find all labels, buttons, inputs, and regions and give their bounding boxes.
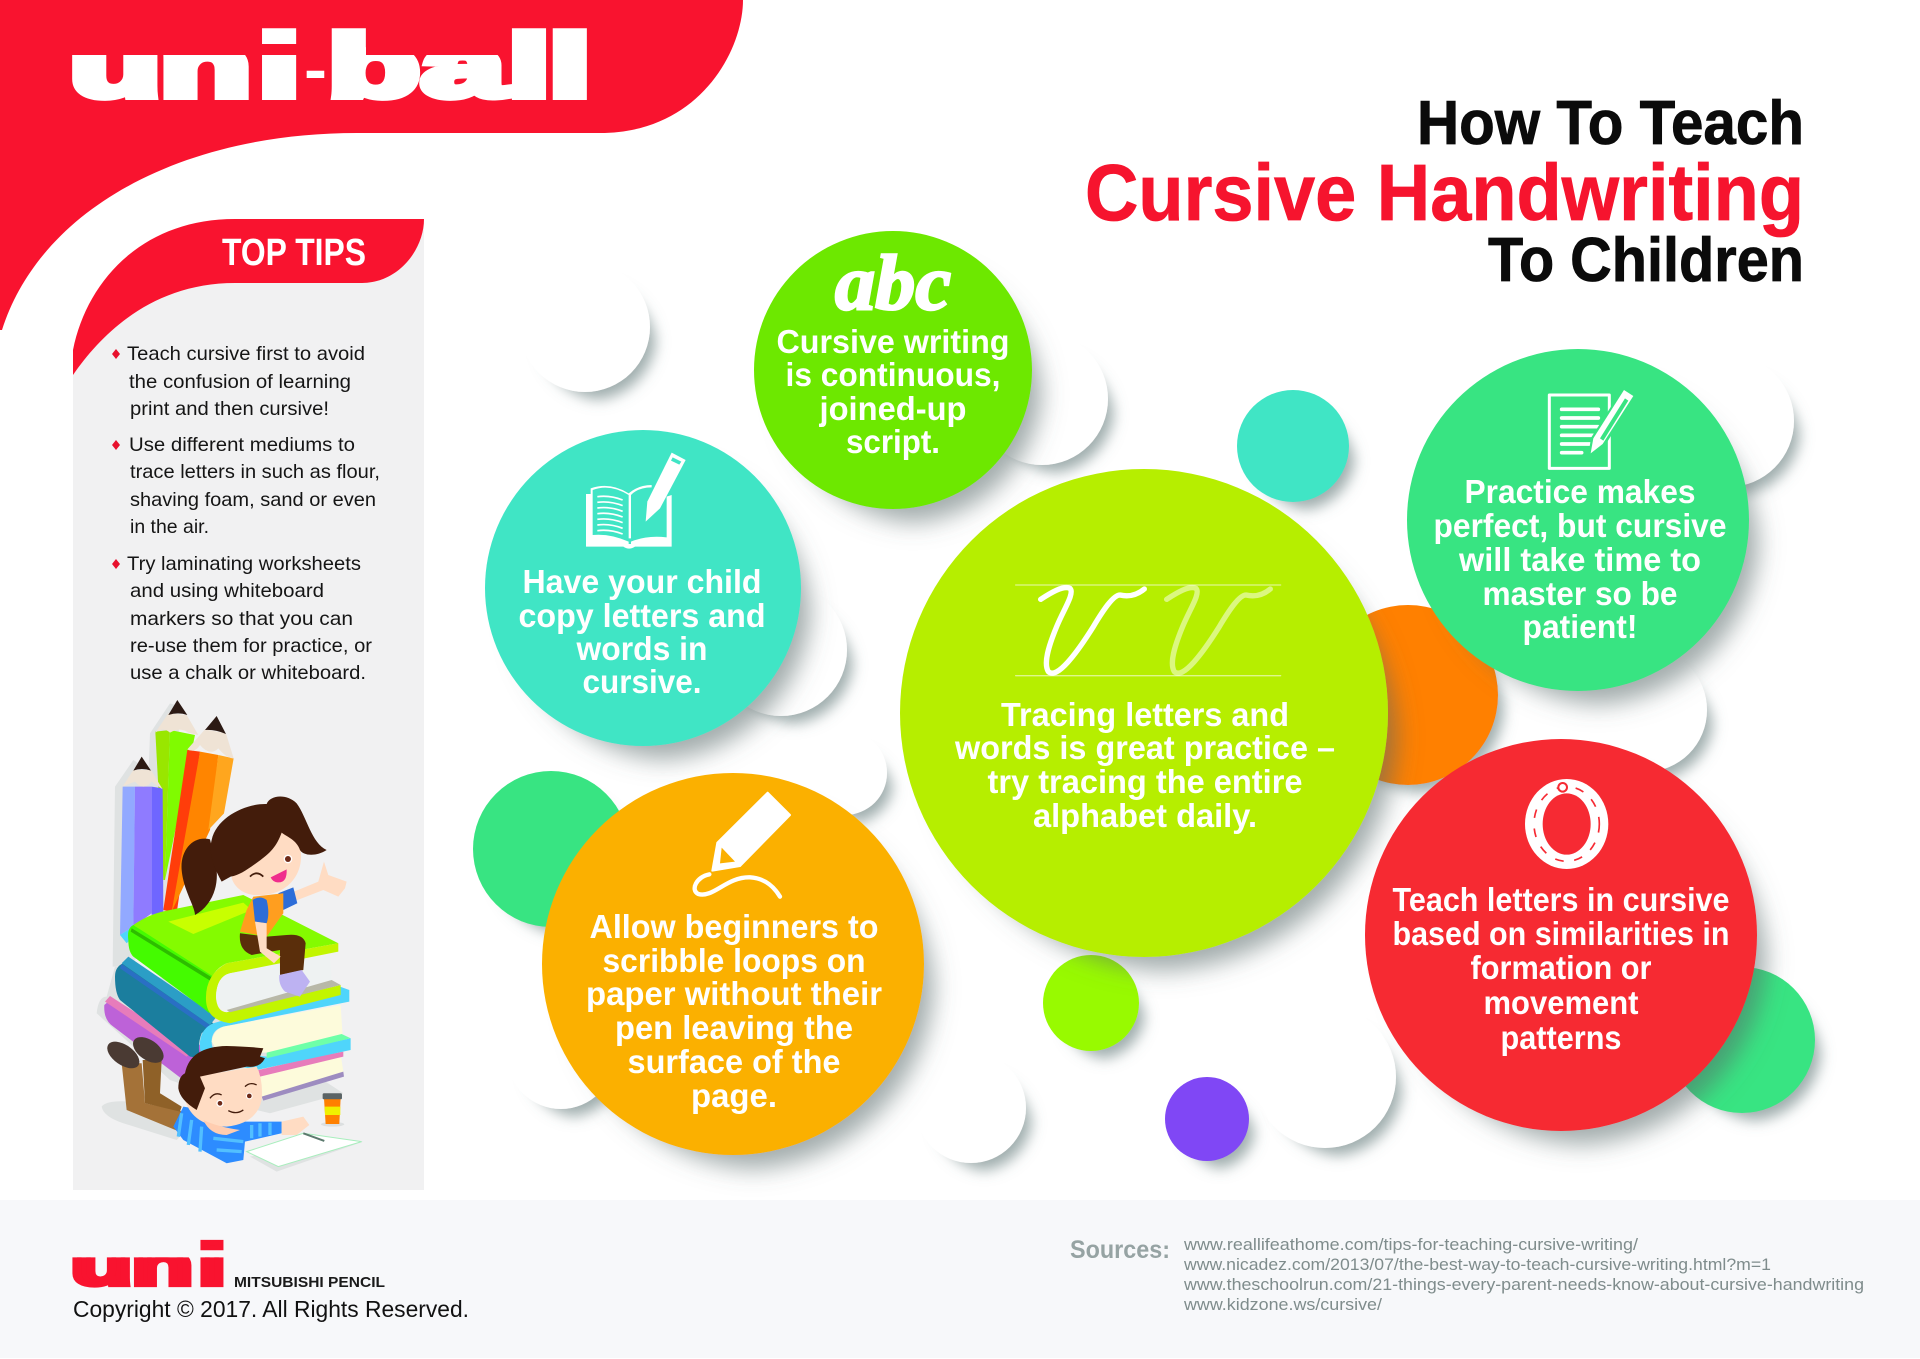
illustration: children with books and pencils [97,700,363,1172]
logo: uni-ball: ball [328,17,591,115]
text: cursive. [582,663,702,700]
text: try tracing the entire [988,763,1302,800]
purple pencil [120,757,163,943]
sources [1070,1236,1864,1314]
text: patient! [1522,608,1638,645]
top tips banner [73,219,424,375]
circle: scribble loops [542,773,924,1155]
text: Tracing letters and [1001,696,1289,733]
circle: similarities [1365,739,1757,1131]
text: perfect, but cursive [1434,507,1726,544]
text: scribble loops on [602,942,866,979]
text: patterns [1500,1019,1622,1056]
text: paper without their [586,975,882,1012]
panel background [73,219,424,1190]
title: How To Teach [1417,89,1804,158]
text: movement [1484,984,1638,1021]
purple book [104,996,344,1103]
tip list: trace letters in such as flour, [130,461,380,483]
logo: uni-ball [72,28,587,101]
orange pencil [163,716,234,913]
text: alphabet daily. [1033,797,1257,834]
tip list [127,343,380,684]
text: copy letters and [518,597,766,634]
circle: tracing [900,469,1388,957]
tip list: the confusion of learning [129,371,351,393]
text: Allow beginners to [590,908,878,945]
tip list: Use different mediums to [129,434,355,456]
green pencil [155,700,198,880]
text: Have your child [522,563,762,600]
text: script. [846,423,940,460]
tip list: Try laminating worksheets [127,553,361,575]
green book [128,895,341,1023]
icon: abc: abc [835,239,951,326]
heading: top tips: TOP TIPS [222,232,366,274]
title [1085,89,1804,295]
sources: www.reallifeathome.com/tips-for-teaching-cursive-writing/ [1183,1236,1638,1254]
sources: www.theschoolrun.com/21-things-every-parent-needs-know-about-cursive-handwriting [1183,1276,1864,1294]
text [586,908,882,1114]
tip list: re-use them for practice, or [130,635,373,657]
shadows [97,703,363,1172]
text: page. [691,1077,777,1114]
boy [103,1032,362,1167]
footer background [0,1200,1920,1358]
circle: copy letters [485,430,801,746]
white decorative circles [507,262,1794,1163]
text: based on similarities in [1392,915,1730,952]
tip list: shaving foam, sand or even [130,489,376,511]
circle: practice [1407,349,1749,691]
sources: www.kidzone.ws/cursive/ [1183,1296,1382,1314]
footer logo: uni mitsubishi pencil: uni [71,1233,226,1297]
text [954,696,1335,834]
text [1392,881,1730,1056]
text: words in [576,630,708,667]
footer logo: uni mitsubishi pencil: MITSUBISHI PENCIL [234,1274,385,1291]
text: is continuous, [786,356,1000,393]
text [1434,473,1726,645]
text: pen leaving the [615,1009,853,1046]
panel: top tips [73,219,424,1190]
title: To Children [1488,226,1804,295]
footer logo: uni mitsubishi pencil [72,1240,384,1288]
text: joined-up [819,390,966,427]
tip list: markers so that you can [130,608,353,630]
text: Practice makes [1464,473,1696,510]
sources: www.nicadez.com/2013/07/the-best-way-to-teach-cursive-writing.html?m=1 [1183,1256,1771,1274]
bullet markers [112,349,120,569]
text: Cursive writing [776,323,1010,360]
tip list: use a chalk or whiteboard. [130,662,366,684]
icon: dashed letter O [1525,779,1608,869]
copyright: Copyright © 2017. All Rights Reserved. [73,1296,469,1322]
tip list: print and then cursive! [130,398,329,420]
title: Cursive Handwriting [1085,148,1804,237]
tip list: Teach cursive first to avoid [127,343,365,365]
text: master so be [1482,575,1678,612]
text [518,563,766,700]
icon: traced letter V [1016,585,1281,676]
header red swoosh [0,0,743,330]
icon: pencil with scribble [695,793,790,897]
sources: Sources: [1070,1236,1170,1264]
logo: uni-ball: uni [70,17,300,115]
blue book [115,957,351,1070]
tip list: and using whiteboard [130,580,324,602]
icon: open book and pencil [586,453,686,549]
tip list: in the air. [130,516,209,538]
coloured accent circles [473,390,1815,1161]
icon: document and pencil [1549,389,1634,468]
text [776,323,1010,460]
text: will take time to [1458,541,1701,578]
text: surface of the [628,1043,840,1080]
text: Teach letters in cursive [1392,881,1730,918]
girl [182,797,347,997]
circle: cursive writing [754,231,1032,509]
text: words is great practice – [954,729,1335,766]
text: formation or [1470,949,1652,986]
logo: uni-ball: - [304,36,327,103]
